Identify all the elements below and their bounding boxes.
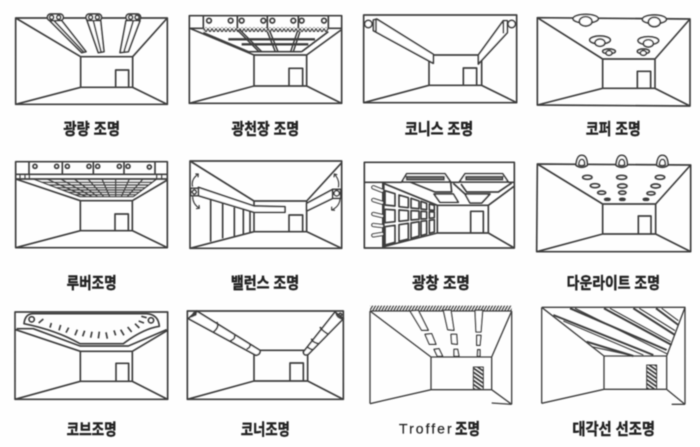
panel: Troffer조명 (370, 306, 512, 438)
icon: troffer lights (410, 310, 483, 356)
label: 광창 조명 (412, 275, 470, 293)
icon: three ceiling beams (47, 14, 141, 53)
label: 코니스 조명 (405, 121, 473, 139)
icon: luminous ceiling lamps (203, 18, 328, 52)
icon: corner lights (188, 311, 343, 355)
panel: 코브조명 (15, 312, 168, 439)
label: 조명 (455, 420, 480, 438)
icon: downlights (576, 155, 668, 200)
ceiling hatch (370, 306, 512, 311)
label: 다운라이트 조명 (567, 275, 660, 293)
label (399, 420, 480, 438)
label: 광천장 조명 (231, 121, 299, 139)
panel: 대각선 선조명 (542, 307, 685, 438)
icon: coffer lights (573, 14, 666, 55)
label: 루버조명 (67, 275, 117, 293)
icon: hatched door (473, 367, 483, 389)
panel: 다운라이트 조명 (537, 155, 691, 293)
label: 코퍼 조명 (586, 121, 641, 139)
panel: 코퍼 조명 (537, 14, 690, 139)
wall column (379, 182, 387, 247)
panel: 코니스 조명 (364, 15, 517, 139)
panel: 광창 조명 (364, 162, 514, 293)
panel: 코너조명 (187, 311, 343, 439)
label: 코브조명 (67, 421, 117, 439)
icon: wall window grid (385, 191, 434, 245)
icon: valance lights and arrows (191, 174, 341, 212)
icon: cove light (17, 314, 167, 346)
panel: 루버조명 (16, 162, 167, 293)
icon: wall tubes (373, 187, 382, 235)
panel: 광천장 조명 (189, 16, 342, 139)
icon: louver grid (20, 164, 162, 197)
icon: cornice troughs (365, 19, 515, 64)
icon: diagonal light lines (553, 308, 678, 356)
label: 광량 조명 (63, 121, 120, 139)
icon: skylights (402, 174, 512, 203)
icon: hatched door (647, 365, 657, 389)
label: 밸런스 조명 (231, 275, 299, 293)
label: 코너조명 (241, 421, 290, 439)
label: 대각선 선조명 (572, 420, 655, 438)
panel: 광량 조명 (16, 14, 167, 139)
label: Troffer (399, 421, 452, 437)
panel: 밸런스 조명 (190, 161, 342, 293)
